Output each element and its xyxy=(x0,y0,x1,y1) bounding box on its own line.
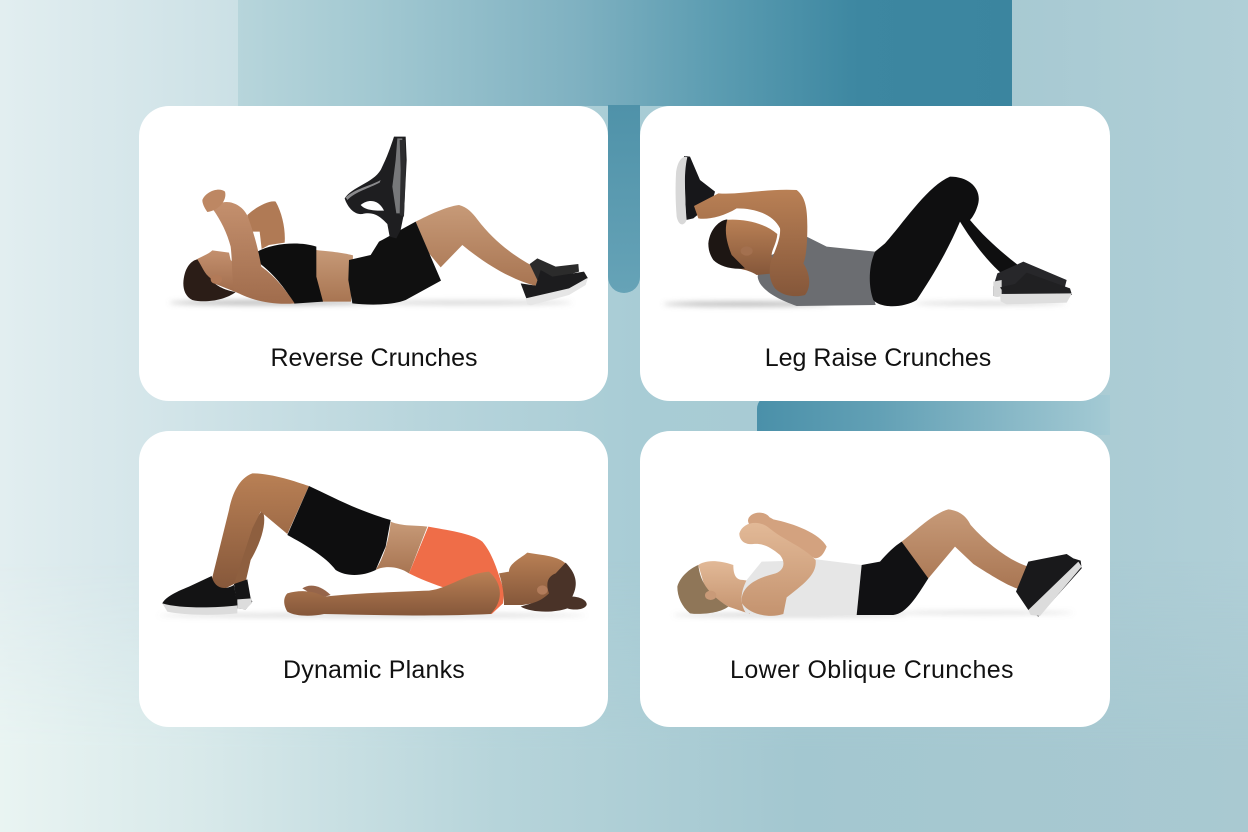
head xyxy=(499,553,587,612)
background: teal bar below right card xyxy=(757,395,1110,435)
panel: Reverse Crunches xyxy=(139,106,608,401)
background: notch between top cards xyxy=(608,105,640,293)
white top xyxy=(742,559,862,615)
floor shadow xyxy=(159,614,586,617)
shorts xyxy=(857,542,928,615)
far leg xyxy=(234,510,264,585)
panel: Lower Oblique Crunches xyxy=(640,431,1110,726)
band device xyxy=(345,137,407,238)
shoes xyxy=(993,262,1072,304)
label: Reverse Crunches xyxy=(270,344,478,372)
leg xyxy=(902,509,1034,591)
near arm xyxy=(213,202,295,304)
raised shoe xyxy=(676,156,715,224)
shorts xyxy=(287,486,391,575)
illustration: lower oblique crunch figure xyxy=(677,509,1082,620)
shorts xyxy=(348,222,441,305)
label: Leg Raise Crunches xyxy=(765,344,991,372)
panel: Dynamic Planks xyxy=(139,431,608,726)
illustration: glute bridge figure xyxy=(162,473,587,620)
shoes xyxy=(521,258,588,305)
near arm xyxy=(739,523,816,616)
far arm xyxy=(748,513,827,558)
illustration: leg raise crunch figure xyxy=(665,156,1072,310)
arm xyxy=(694,190,809,296)
orange top xyxy=(409,527,504,614)
shoe xyxy=(1016,554,1082,617)
background: top teal band xyxy=(238,0,1012,106)
label: Dynamic Planks xyxy=(283,656,465,684)
illustration: reverse crunch figure xyxy=(171,136,588,308)
floor shadow xyxy=(169,300,572,305)
arm xyxy=(284,572,500,616)
panel: Leg Raise Crunches xyxy=(640,106,1110,401)
label: Lower Oblique Crunches xyxy=(730,656,1014,684)
near leg xyxy=(212,473,309,592)
background: bottom fade xyxy=(8,726,349,832)
leg xyxy=(416,205,541,286)
midriff xyxy=(376,522,427,573)
head xyxy=(708,219,777,275)
fists xyxy=(202,190,225,212)
midriff xyxy=(311,249,353,302)
shoes xyxy=(162,576,252,615)
leggings xyxy=(870,177,1027,306)
head xyxy=(677,561,753,614)
head xyxy=(183,250,252,301)
far arm xyxy=(247,201,285,249)
floor shadow xyxy=(673,611,1073,617)
floor shadow xyxy=(663,302,1067,306)
shirt xyxy=(758,237,876,306)
crop top xyxy=(257,244,323,304)
